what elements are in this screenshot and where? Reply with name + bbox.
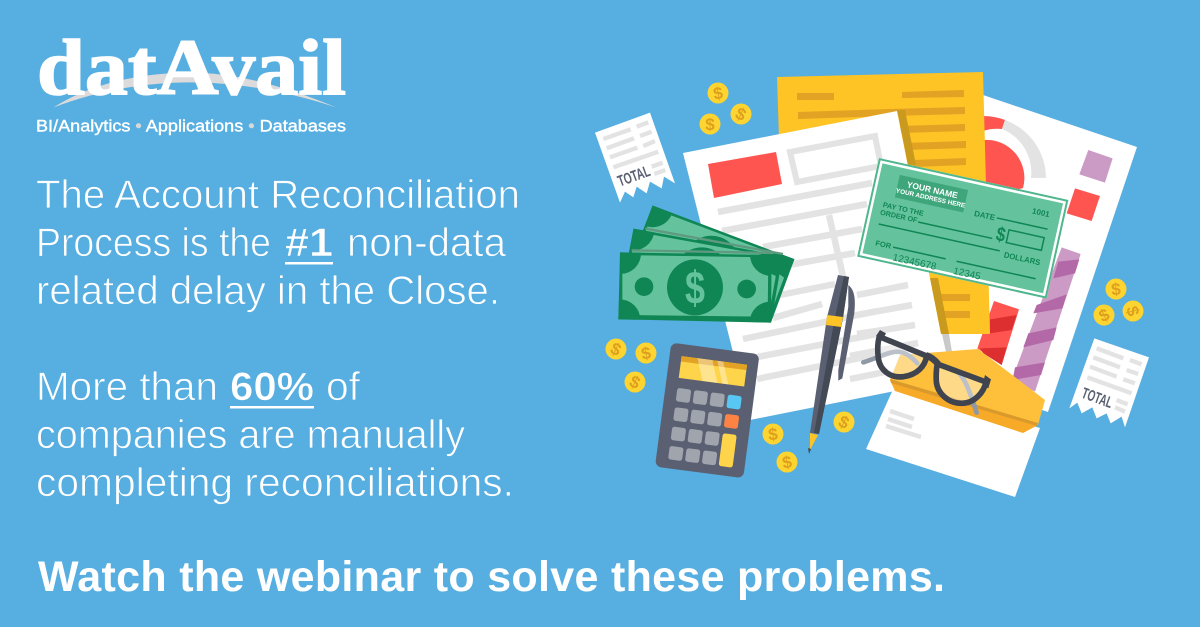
cheque fields: $ (994, 223, 1007, 247)
coins: bottom cluster: $ (835, 412, 853, 433)
cheque fields: 12345678 (892, 252, 938, 273)
front banknote (618, 250, 772, 323)
pen (808, 275, 855, 454)
text block: delay statement: Process is the (36, 221, 271, 265)
receipt: left (595, 113, 675, 203)
form lines (718, 183, 918, 379)
coins: bottom cluster: $ (767, 425, 779, 444)
calculator (655, 343, 760, 478)
cheque fields: FOR (875, 238, 893, 251)
illustration: finance paperwork (595, 72, 1149, 497)
front banknote: $ (685, 262, 705, 314)
document: right report with charts (894, 95, 1137, 412)
text block: delay statement (36, 173, 520, 313)
name block (894, 175, 969, 213)
text block: delay statement: The Account Reconciliation (36, 173, 520, 217)
address box (790, 136, 881, 182)
text block: manual reconciliation statistic: 60% (230, 365, 314, 409)
envelope (866, 349, 1045, 497)
cheque fields: PAY TO THE (882, 200, 925, 218)
text block: delay statement: non-data (347, 221, 507, 265)
text block: manual reconciliation statistic: of (326, 365, 361, 409)
logo: datAvail: datAvail (37, 25, 346, 112)
cheque fields: DATE (973, 209, 997, 223)
glasses (863, 330, 991, 413)
document: yellow ledger (777, 72, 990, 352)
purple striped bar (1012, 247, 1081, 392)
coins: left cluster: $ (626, 372, 644, 393)
cheque fields: ORDER OF (879, 208, 919, 225)
coins: top cluster (700, 82, 752, 134)
coins: right cluster (1094, 278, 1144, 326)
middle banknote (620, 226, 783, 323)
coins: right cluster: $ (1122, 304, 1143, 319)
display (679, 356, 747, 387)
coins: right cluster: $ (1110, 280, 1122, 299)
text block: manual reconciliation statistic: More than (36, 365, 218, 409)
legend swatches (1067, 150, 1113, 221)
coins: left cluster: $ (607, 339, 625, 360)
receipt: right (1069, 338, 1149, 427)
coins: left cluster: $ (640, 343, 653, 364)
back banknote (627, 205, 795, 323)
coins: bottom cluster (762, 412, 854, 473)
cheque (857, 158, 1068, 299)
red header block (708, 152, 782, 198)
name block: YOUR NAME (906, 179, 959, 200)
donut chart (983, 116, 1046, 200)
coins: right cluster: $ (1096, 305, 1113, 326)
coins: top cluster: $ (705, 115, 715, 134)
logo: datAvail: BI/Analytics • Applications • Databases (36, 118, 346, 136)
coins: top cluster: $ (712, 83, 725, 104)
coins: left cluster (606, 338, 656, 393)
call to action: Watch the webinar to solve these problems. (38, 553, 945, 601)
red striped bar (977, 301, 1019, 365)
coins: top cluster: $ (732, 104, 750, 125)
text block: manual reconciliation statistic (36, 365, 514, 505)
receipt: left: TOTAL (616, 163, 653, 190)
cheque fields (870, 174, 1052, 295)
text block: delay statement: #1 (285, 221, 333, 265)
text block: delay statement: related delay in the Close. (36, 269, 500, 313)
cheque fields: 1001 (1031, 207, 1051, 219)
banknotes (618, 205, 795, 323)
keypad (668, 388, 742, 468)
document: main white form (683, 111, 950, 420)
coins: bottom cluster: $ (781, 452, 794, 473)
cheque fields: 12345 (952, 266, 982, 283)
receipt: right: TOTAL (1079, 385, 1115, 412)
text block: manual reconciliation statistic: completing reconciliations. (36, 461, 514, 505)
text block: manual reconciliation statistic: companies are manually (36, 413, 465, 457)
cheque fields: DOLLARS (1003, 250, 1042, 267)
name block: YOUR ADDRESS HERE (895, 188, 966, 210)
